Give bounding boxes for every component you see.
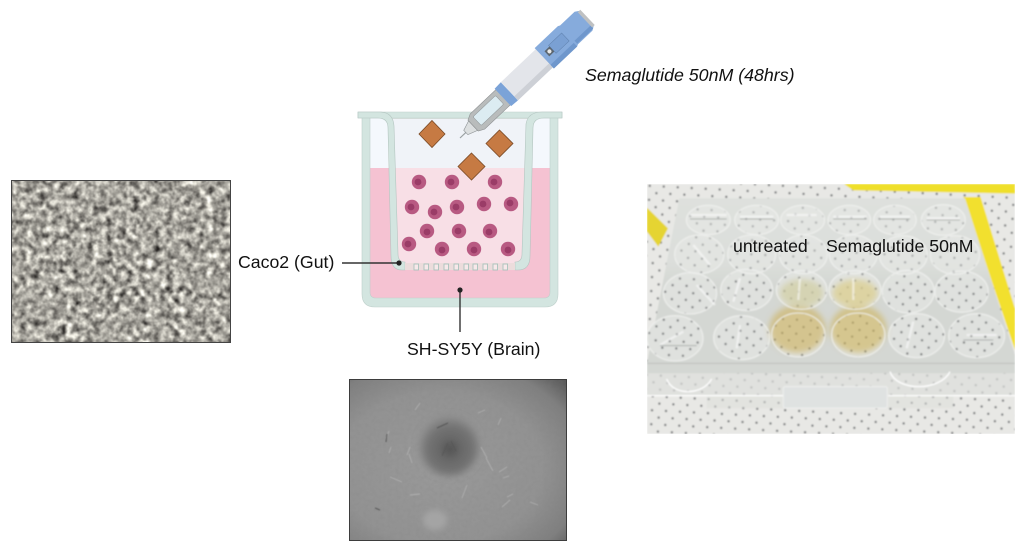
lower pink between membrane and base — [392, 264, 528, 298]
label: SH-SY5Y (Brain): SH-SY5Y (Brain) — [407, 339, 540, 359]
pen end cap — [578, 10, 595, 27]
porous membrane — [405, 263, 515, 270]
blue ring — [494, 82, 518, 107]
insert wall left — [358, 112, 405, 270]
outer chamber air zones — [370, 118, 550, 168]
leader line: SH-SY5Y — [457, 287, 463, 332]
photo: Caco2 gut cells micrograph — [11, 180, 231, 343]
hub — [461, 121, 478, 137]
pen body — [501, 49, 553, 100]
yellow medium glow — [769, 305, 825, 353]
photo: SH-SY5Y brain cells micrograph — [349, 379, 567, 541]
perforated mat background — [647, 184, 1015, 434]
drug particles — [419, 120, 513, 180]
well rims — [647, 205, 1005, 361]
label: Semaglutide 50nM on plate: Semaglutide 50nM — [826, 236, 974, 256]
insert wall right — [515, 112, 562, 270]
upper chamber media — [392, 118, 528, 168]
dose window — [549, 33, 569, 53]
insert pink medium — [392, 168, 528, 264]
icon: semaglutide injector pen — [450, 7, 597, 148]
outer well wall — [358, 112, 562, 307]
needle — [460, 131, 467, 138]
outer pink medium — [370, 168, 550, 298]
dose dial — [544, 46, 554, 56]
cells — [402, 175, 518, 256]
plate skirt lines — [647, 372, 1015, 396]
plate body — [647, 198, 1015, 365]
right yellow strip — [963, 197, 1015, 350]
plate skirt translucent — [647, 373, 1015, 395]
diagram: transwell — [358, 112, 562, 307]
transwell top line — [392, 116, 528, 119]
cartridge window — [473, 95, 504, 126]
cartridge holder — [466, 89, 511, 133]
left yellow strip — [647, 208, 668, 247]
upper plate haze — [666, 198, 989, 278]
plate handle — [783, 387, 887, 408]
label: Caco2 (Gut): Caco2 (Gut) — [238, 252, 334, 272]
well highlights — [660, 215, 997, 348]
leader line: Caco2 — [342, 260, 402, 266]
label: untreated: untreated — [733, 236, 808, 256]
wells fill — [648, 270, 1004, 360]
caption: Semaglutide dose: Semaglutide 50nM (48hrs) — [585, 65, 795, 85]
yellow foam block — [844, 184, 1015, 194]
photo: 24-well plate — [647, 184, 1015, 434]
blue dose housing — [535, 8, 596, 68]
